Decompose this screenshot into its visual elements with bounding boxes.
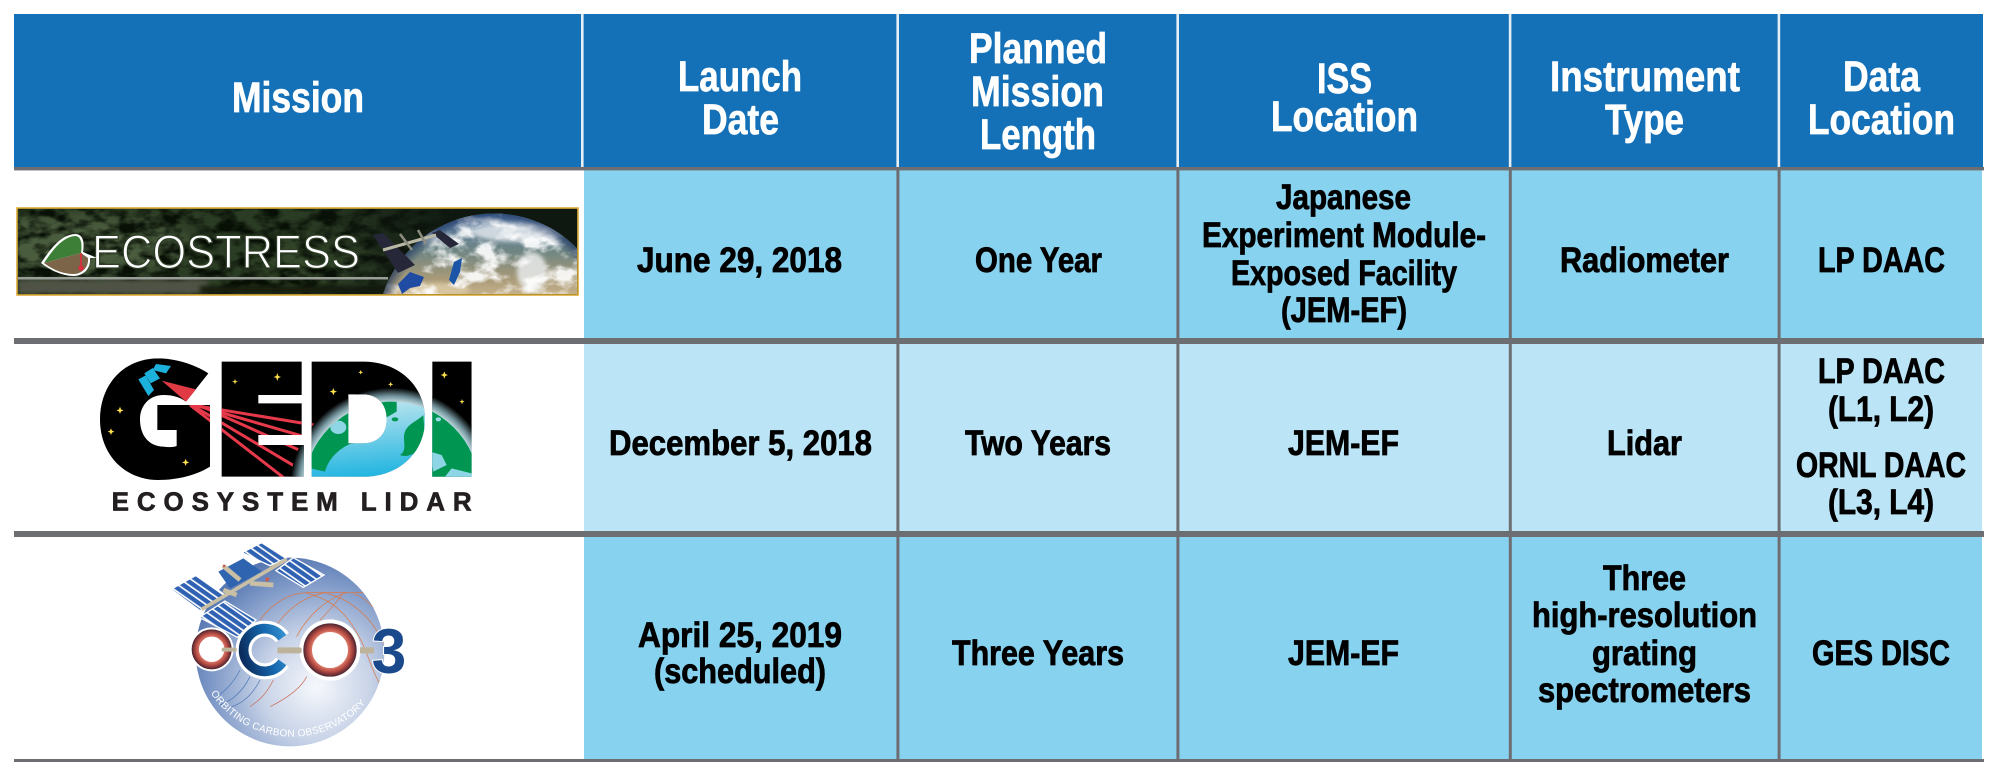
panel: OCO-3 row [172, 537, 1982, 759]
wordmark: 3: 3 [372, 617, 406, 687]
cell: mission length One Year: One Year [975, 241, 1102, 280]
cell: instrument grating spectrometers [1532, 559, 1757, 710]
cell: data locations LP DAAC and ORNL DAAC: LP DAAC [1818, 352, 1945, 391]
wordmark: ECOSTRESS: ECOSTRESS [92, 225, 360, 278]
wordmark: first O [190, 627, 234, 671]
logo: ECOSTRESS banner [16, 207, 579, 296]
icon: Earth globe [383, 214, 577, 294]
cell: instrument grating spectrometers: high-resolution [1532, 596, 1757, 635]
wordmark: second O [299, 619, 361, 681]
panel: table header row [14, 14, 1983, 167]
cell: instrument Radiometer: Radiometer [1560, 241, 1729, 280]
icon: red laser wedge [162, 381, 196, 402]
wordmark: ECOSYSTEM LIDAR: ECOSYSTEM LIDAR [112, 487, 472, 517]
cell: ISS location JEM-EF full name: (JEM-EF) [1281, 291, 1407, 330]
heading: Planned Mission Length: Length [980, 111, 1096, 159]
cell: instrument grating spectrometers: spectrometers [1538, 671, 1751, 710]
heading: ISS Location: ISS [1317, 55, 1372, 103]
icon: blue globe [196, 558, 384, 746]
cell: data locations LP DAAC and ORNL DAAC: (L3, L4) [1828, 483, 1934, 522]
heading: Planned Mission Length: Planned [969, 25, 1107, 73]
heading: Launch Date [678, 53, 802, 144]
icon: ISS silhouette [138, 364, 171, 396]
cell: mission length Two Years: Two Years [965, 424, 1111, 463]
cell: instrument grating spectrometers: Three [1603, 559, 1686, 598]
heading: Instrument Type [1550, 53, 1740, 144]
cell: ISS location JEM-EF full name: Experiment Module- [1202, 216, 1486, 255]
heading: Data Location: Data [1843, 53, 1921, 101]
heading: Instrument Type: Instrument [1550, 53, 1740, 101]
cell: data location LP DAAC: LP DAAC [1818, 241, 1945, 280]
cell: launch date April 25, 2019 scheduled: April 25, 2019 [638, 616, 842, 655]
cell: instrument Lidar: Lidar [1607, 424, 1682, 463]
heading: Launch Date: Date [702, 96, 779, 144]
cell: ISS location JEM-EF: JEM-EF [1288, 634, 1399, 673]
orbit tracks [213, 593, 385, 707]
icon: space station [171, 543, 324, 637]
cell: ISS location JEM-EF: JEM-EF [1288, 424, 1399, 463]
heading: Mission: Mission [232, 74, 364, 122]
panel: ECOSTRESS row [16, 170, 1982, 338]
curved label: Orbiting Carbon Observatory: ORBITING CARBON OBSERVATORY [212, 690, 364, 737]
cell: ISS location JEM-EF full name: Exposed Facility [1231, 254, 1457, 293]
cell: launch date April 25, 2019 scheduled: (scheduled) [654, 652, 826, 691]
cell: launch date December 5, 2018: December 5, 2018 [609, 424, 872, 463]
heading: Data Location [1808, 53, 1955, 144]
wordmark: connecting rods [222, 647, 374, 653]
heading: Launch Date: Launch [678, 53, 802, 101]
cell: ISS location JEM-EF full name: Japanese [1276, 178, 1411, 217]
cell: data locations LP DAAC and ORNL DAAC: (L1, L2) [1828, 390, 1934, 429]
heading: Planned Mission Length: Mission [971, 68, 1104, 116]
cell: launch date April 25, 2019 scheduled [638, 616, 842, 691]
cell: launch date June 29, 2018: June 29, 2018 [637, 241, 842, 280]
heading: Planned Mission Length [969, 25, 1107, 159]
panel: GEDI row [100, 344, 1982, 531]
wordmark: C [244, 629, 282, 671]
wordmark: GEDI letters with Earth and lasers [100, 358, 472, 480]
logo: GEDI Ecosystem Lidar [100, 358, 472, 512]
heading: ISS Location: Location [1271, 93, 1418, 141]
heading: ISS Location [1271, 55, 1418, 141]
cell: data location GES DISC: GES DISC [1812, 634, 1950, 673]
icon: space station [373, 230, 459, 273]
cell: data locations LP DAAC and ORNL DAAC [1796, 352, 1966, 522]
cell: ISS location JEM-EF full name [1202, 178, 1486, 330]
cell: data locations LP DAAC and ORNL DAAC: ORNL DAAC [1796, 446, 1966, 485]
logo: OCO-3 [172, 544, 406, 746]
heading: Instrument Type: Type [1605, 96, 1684, 144]
icon: leaf with thermometer [41, 234, 97, 276]
cell: instrument grating spectrometers: grating [1592, 634, 1697, 673]
heading: Data Location: Location [1808, 96, 1955, 144]
cell: mission length Three Years: Three Years [952, 634, 1124, 673]
